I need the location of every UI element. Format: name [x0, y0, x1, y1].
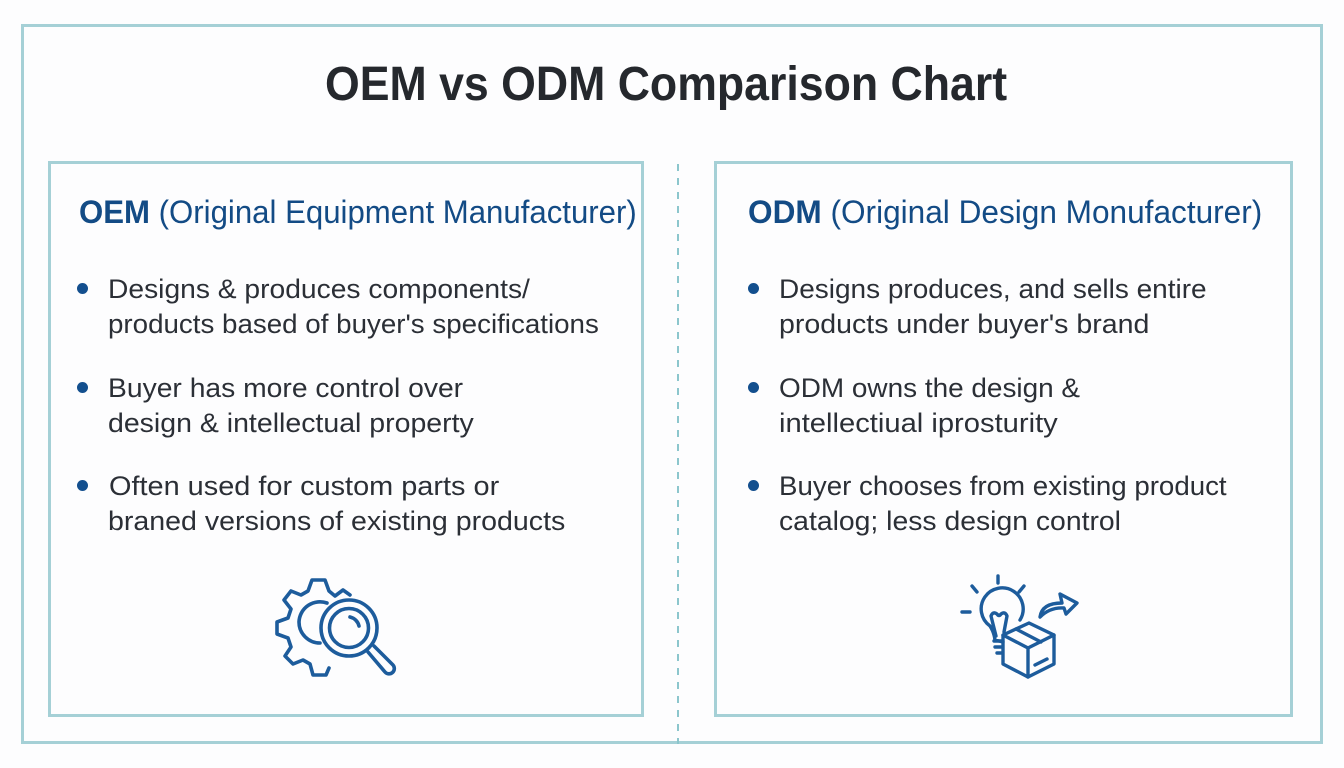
- bullet: OEM 1: Designs & produces components/: [108, 274, 530, 304]
- panel: OEM: [48, 161, 644, 717]
- bullet: ODM 3: Buyer chooses from existing product: [779, 471, 1227, 501]
- icon: gear and magnifying glass: [275, 578, 396, 677]
- bullet: ODM 3: [748, 471, 1227, 536]
- bullet: ODM 1: products under buyer's brand: [779, 309, 1149, 339]
- icon: light bulb, box and arrow: [960, 574, 1079, 679]
- bullet: ODM 3: catalog; less design control: [779, 506, 1121, 536]
- bullet: OEM 2: [77, 373, 474, 438]
- center dashed divider: [677, 164, 679, 744]
- bullet: OEM 3: braned versions of existing products: [108, 506, 565, 536]
- bullet: OEM 3: [77, 471, 565, 536]
- bullet: ODM 1: Designs produces, and sells entire: [779, 274, 1207, 304]
- heading: OEM: OEM (Original Equipment Manufacturer): [79, 194, 637, 230]
- bullet: OEM 3: Often used for custom parts or: [109, 471, 499, 501]
- bullet: OEM 2: Buyer has more control over: [108, 373, 463, 403]
- title: OEM vs ODM Comparison Chart: [325, 58, 1007, 111]
- panel: ODM: [714, 161, 1293, 717]
- panel border: OEM: [48, 161, 644, 717]
- bullet: OEM 1: products based of buyer's specifications: [108, 309, 599, 339]
- bullet: ODM 2: intellectiual iprosturity: [779, 408, 1058, 438]
- heading: ODM: ODM (Original Design Monufacturer): [748, 194, 1262, 230]
- bullet: ODM 2: [748, 373, 1080, 438]
- panel border: ODM: [714, 161, 1293, 717]
- bullet: OEM 1: [77, 274, 599, 339]
- bullet: OEM 2: design & intellectual property: [108, 408, 474, 438]
- bullet: ODM 2: ODM owns the design &: [779, 373, 1080, 403]
- bullet: ODM 1: [748, 274, 1207, 339]
